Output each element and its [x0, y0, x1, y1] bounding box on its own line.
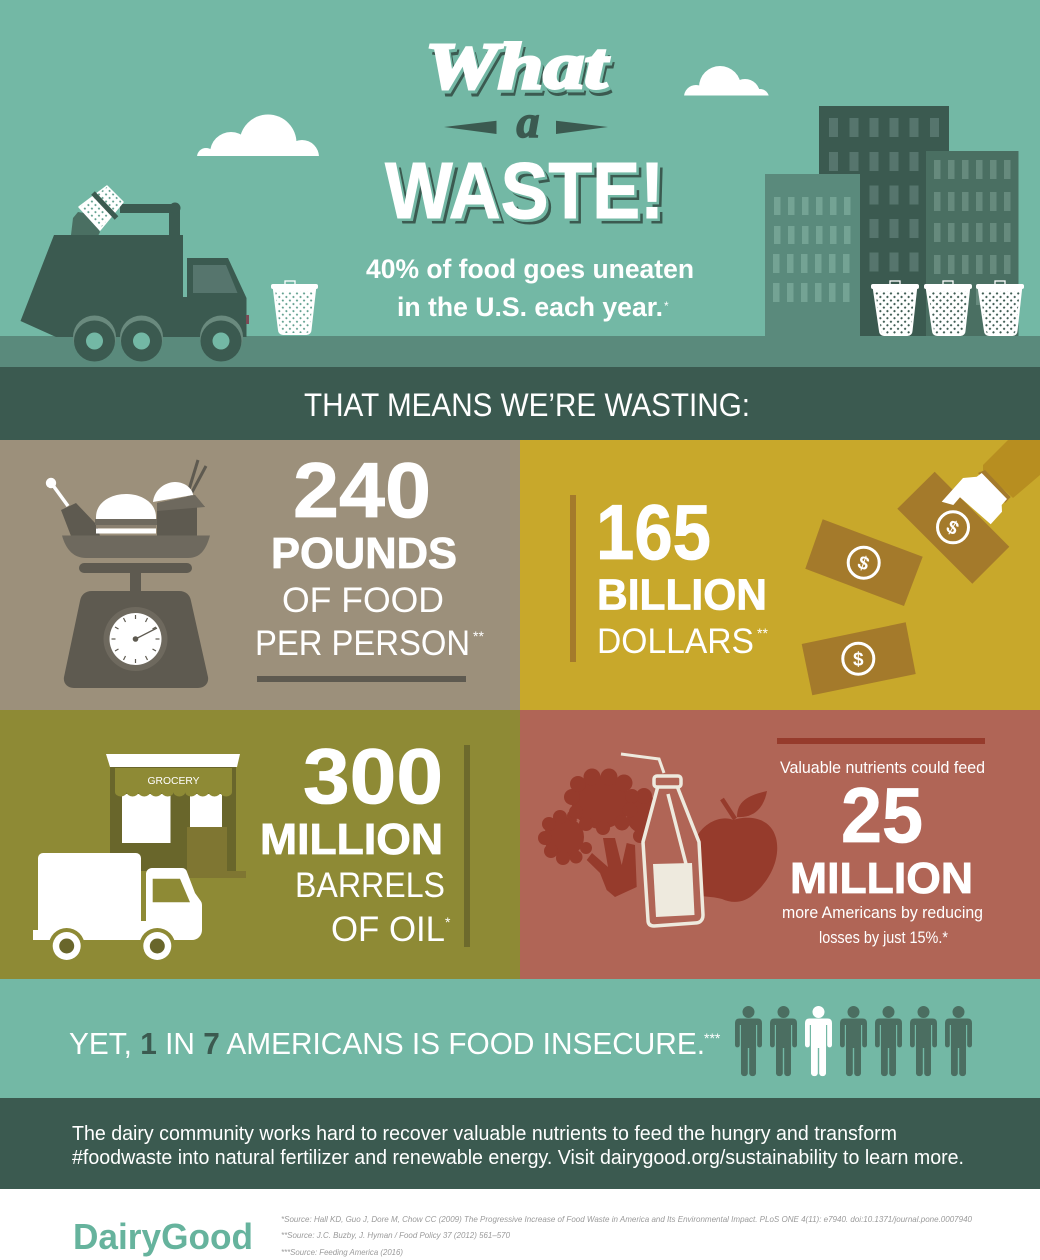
title: WASTE!: WASTE!	[390, 151, 669, 240]
statement: 1 in 7: YET, 1 IN 7 AMERICANS IS FOOD INSECURE.	[69, 1026, 705, 1061]
stat: 300 million barrels of oil: *	[445, 914, 451, 930]
icon: hand dropping money: $	[855, 552, 872, 576]
stat: 25 million Americans: MILLION	[790, 854, 973, 903]
panel: nutrients	[520, 710, 1040, 979]
icon: delivery truck	[33, 853, 202, 964]
icon: hand dropping money: $	[942, 517, 962, 540]
title: What: What	[425, 30, 609, 103]
cloud right	[684, 66, 769, 96]
stat: 25 million Americans: more Americans by reducing	[782, 903, 983, 922]
stat: 300 million barrels of oil: OF OIL	[331, 910, 445, 949]
stat: 300 million barrels of oil: BARRELS	[295, 866, 445, 905]
panel: food insecurity	[0, 979, 1040, 1099]
sources: **Source: J.C. Buzby, J. Hyman / Food Policy 37 (2012) 561–570	[281, 1230, 510, 1240]
panel: dairy community message: #foodwaste into natural fertilizer and renewable energy. Visit dairygood.org/sustainability to learn more.	[72, 1147, 964, 1169]
banner	[0, 367, 1040, 440]
subtitle	[366, 254, 694, 322]
sources: *Source: Hall KD, Guo J, Dore M, Chow CC (2009) The Progressive Increase of Food Waste in America and Its Environmental Impact. PLoS ONE 4(11): e7940. doi:10.1371/journal.pone.0007940	[281, 1214, 972, 1224]
trash can by truck	[271, 281, 318, 334]
panel: barrels of oil	[0, 710, 520, 979]
title: What: What	[427, 33, 611, 106]
stat: 240 pounds of food per person: **	[473, 628, 484, 644]
icon: milk bottle	[621, 754, 703, 926]
stat: 165 billion dollars: **	[757, 625, 768, 641]
logo: DairyGood: DairyGood	[73, 1216, 253, 1257]
icon: scale with food	[46, 460, 210, 688]
stat: 300 million barrels of oil	[260, 732, 451, 949]
statement: 1 in 7: ***	[704, 1030, 721, 1046]
buildings	[765, 106, 1018, 336]
title: What: What	[428, 36, 613, 109]
stat: 300 million barrels of oil: 300	[303, 732, 443, 820]
title: a with arrows: a	[516, 96, 540, 147]
road	[0, 336, 1040, 368]
panel: sky header	[0, 0, 1040, 337]
icon: grocery store: GROCERY	[148, 775, 200, 787]
stat: 165 billion dollars: 165	[596, 488, 711, 576]
stat: 240 pounds of food per person: POUNDS	[271, 529, 457, 578]
stat: 25 million Americans: Valuable nutrients could feed	[780, 758, 985, 777]
icon: apple	[695, 791, 777, 902]
icon: hand dropping money	[802, 440, 1040, 695]
panel: dairy community message: The dairy community works hard to recover valuable nutrients to feed the hungry and transform	[72, 1123, 897, 1145]
stat: 165 billion dollars: DOLLARS	[597, 622, 754, 661]
icon: seven people	[735, 1006, 972, 1076]
stat: 25 million Americans: 25	[841, 771, 923, 859]
panel: billion dollars	[520, 440, 1040, 710]
stat: 240 pounds of food per person: OF FOOD	[282, 581, 444, 620]
stat: 165 billion dollars: BILLION	[597, 570, 767, 620]
panel: dairy community message	[0, 1098, 1040, 1189]
title: WASTE!: WASTE!	[385, 146, 664, 235]
cloud left	[197, 114, 319, 156]
stat: 240 pounds of food per person: 240	[293, 446, 431, 534]
banner: THAT MEANS WE’RE WASTING:	[304, 387, 750, 423]
stat: 240 pounds of food per person: PER PERSON	[255, 624, 470, 663]
icon: grocery store	[106, 754, 246, 878]
subtitle: 40% of food goes uneaten	[366, 254, 694, 284]
stat: 240 pounds of food per person	[255, 446, 484, 663]
stat: 25 million Americans	[780, 758, 985, 947]
subtitle: in the U.S. each year.	[397, 292, 663, 322]
garbage truck	[20, 186, 249, 362]
stat: 165 billion dollars	[596, 488, 768, 661]
stat: 25 million Americans: losses by just 15%.*	[819, 928, 948, 947]
subtitle: *	[664, 299, 669, 313]
icon: hand dropping money: $	[853, 650, 864, 670]
trash cans row	[871, 281, 1024, 335]
sources: ***Source: Feeding America (2016)	[281, 1247, 403, 1257]
sources	[281, 1214, 972, 1257]
icon: broccoli	[538, 768, 664, 897]
footer	[0, 1189, 1040, 1260]
title: WASTE!: WASTE!	[388, 148, 666, 238]
title: a with arrows	[444, 96, 608, 147]
panel: pounds of food	[0, 440, 520, 710]
stat: 300 million barrels of oil: MILLION	[260, 815, 443, 864]
